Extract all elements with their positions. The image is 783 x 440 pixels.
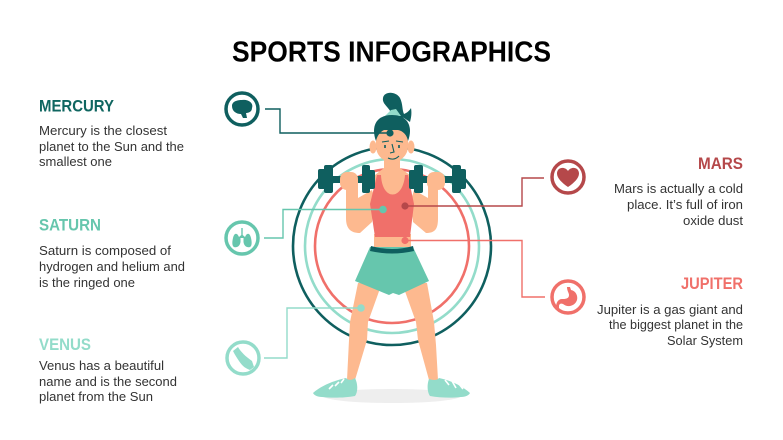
panel: mars text: MARS: [698, 154, 743, 173]
hair bun: [383, 93, 411, 122]
shoes: [313, 378, 357, 398]
connector: saturn: [264, 206, 387, 238]
icon: stomach: [552, 281, 584, 313]
panel: saturn text: [39, 216, 185, 290]
icon: lungs: [226, 222, 258, 254]
neck and chest: [375, 152, 410, 200]
panel: jupiter text: [597, 274, 743, 348]
panel: mercury text: Mercury is the closest: [39, 123, 167, 138]
dumbbell right: [409, 165, 466, 193]
tank top: [370, 175, 414, 237]
panel: jupiter text: Solar System: [667, 333, 743, 348]
panel: mercury text: planet to the Sun and the: [39, 139, 184, 154]
panel: mars text: place. It’s full of iron: [627, 197, 743, 212]
connector: mars: [401, 178, 544, 210]
panel: venus text: name and is the second: [39, 374, 177, 389]
panel: jupiter text: Jupiter is a gas giant and: [597, 302, 743, 317]
icon: heart: [552, 161, 584, 193]
panel: venus text: planet from the Sun: [39, 389, 153, 404]
panel: venus text: Venus has a beautiful: [39, 358, 164, 373]
head: [376, 128, 408, 162]
arms: [346, 178, 375, 233]
panel: mars text: Mars is actually a cold: [614, 181, 743, 196]
figure: athlete: [313, 93, 470, 398]
fists: [340, 172, 358, 190]
panel: saturn text: is the ringed one: [39, 275, 135, 290]
panel: venus text: [39, 335, 177, 404]
panel: mars text: [614, 154, 743, 228]
panel: mercury text: MERCURY: [39, 96, 115, 116]
title: SPORTS INFOGRAPHICS: [232, 36, 551, 68]
panel: mercury text: smallest one: [39, 154, 112, 169]
hair: [374, 115, 410, 141]
ears: [370, 140, 414, 154]
waistband: [370, 246, 414, 254]
connector: venus: [264, 304, 365, 358]
floor shadow: [323, 389, 461, 403]
face: [382, 141, 403, 159]
panel: mars text: oxide dust: [683, 213, 743, 228]
panel: saturn text: Saturn is composed of: [39, 243, 171, 258]
concentric rings: [293, 147, 491, 345]
panel: saturn text: hydrogen and helium and: [39, 259, 185, 274]
dumbbell left: [318, 165, 375, 193]
legs: [347, 283, 382, 380]
shorts: [355, 247, 429, 295]
panel: venus text: VENUS: [39, 335, 91, 354]
midriff: [374, 234, 411, 249]
panel: jupiter text: JUPITER: [681, 274, 743, 293]
connector: jupiter: [401, 237, 545, 297]
panel: mercury text: [39, 96, 184, 169]
panel: jupiter text: the biggest planet in the: [609, 317, 743, 332]
connector: mercury: [265, 109, 394, 137]
icon: brain: [226, 93, 258, 125]
panel: saturn text: SATURN: [39, 216, 101, 234]
icon: bone: [227, 342, 259, 374]
